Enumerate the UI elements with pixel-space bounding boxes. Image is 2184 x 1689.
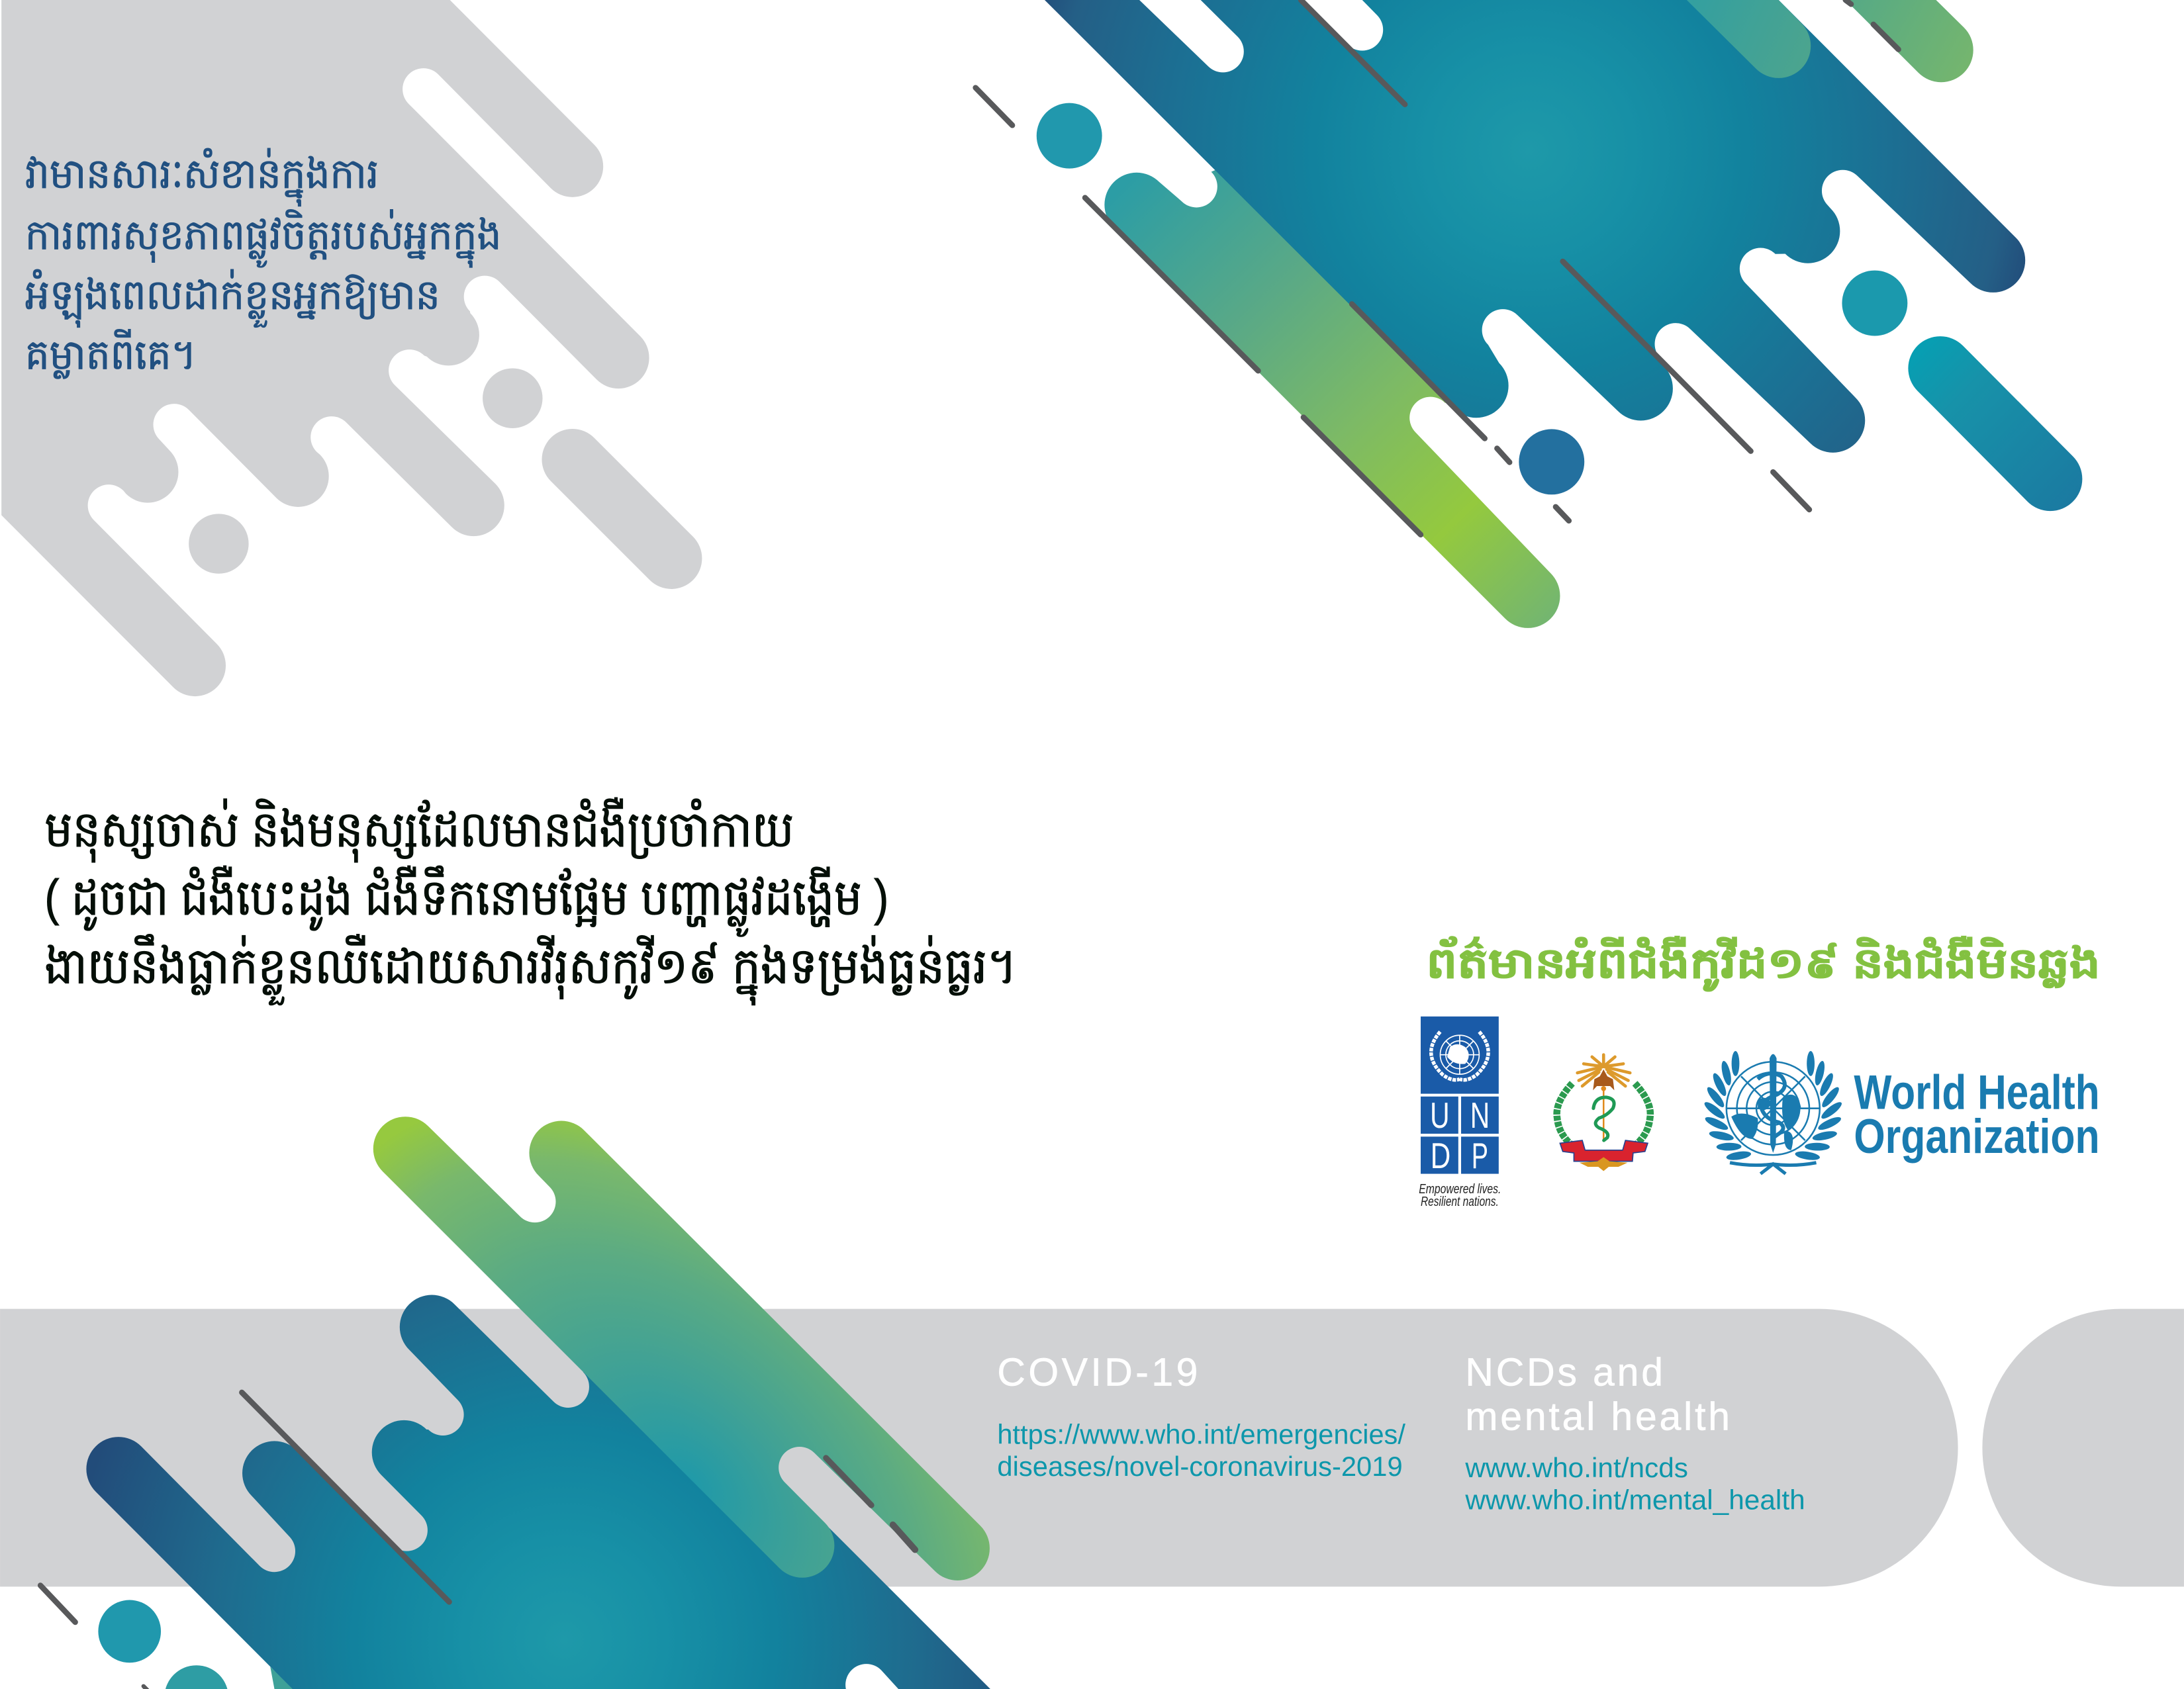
main message text: មនុស្សចាស់ និងមនុស្សដែលមានជំងឺប្រចាំកាយ: [44, 798, 794, 863]
gradient pill: [1940, 368, 2050, 479]
teal lobe: [164, 1665, 228, 1689]
top right graphic: [976, 0, 2050, 628]
green diagonal shape: [373, 1117, 990, 1580]
ribbon: [1730, 1163, 1817, 1174]
footer column: COVID-19: [997, 1351, 1405, 1482]
intro text block: គម្លាតពីគេ។: [25, 329, 197, 379]
footer column: COVID-19: COVID-19: [997, 1351, 1198, 1394]
wreath right: [1795, 1051, 1844, 1162]
wordmark: [1854, 1065, 2100, 1164]
crown: [1593, 1070, 1614, 1090]
blue main shape: [86, 1295, 990, 1689]
main message text: [44, 798, 1017, 1005]
teal circle: [1842, 271, 1907, 336]
teal circle: [1037, 103, 1102, 169]
staff: [1603, 1089, 1604, 1140]
blue main shape: [1045, 0, 2025, 453]
footer column: COVID-19: https://www.who.int/emergencies/: [997, 1419, 1405, 1450]
snake: [1593, 1097, 1614, 1140]
emblem: [1702, 1051, 1844, 1174]
dark accent lines: [976, 0, 1899, 535]
green diagonal shape: [1104, 153, 1560, 628]
intro text block: វាមានសារៈសំខាន់ក្នុងការ: [25, 148, 379, 206]
footer band: [0, 1309, 1958, 1586]
logo: UNDP: D: [1431, 1135, 1450, 1176]
wreath left: [1702, 1051, 1752, 1162]
UN emblem: [1431, 1032, 1488, 1080]
logo: World Health Organization: [1702, 1051, 2100, 1174]
footer column: NCDs and mental health: www.who.int/ncds: [1464, 1452, 1688, 1483]
continents: [1731, 1095, 1801, 1150]
footer column: COVID-19: diseases/novel-coronavirus-2019: [997, 1451, 1403, 1482]
grey decorative shape top left: [1, 0, 671, 696]
staff: [1770, 1054, 1777, 1153]
footer column: NCDs and mental health: NCDs and: [1465, 1351, 1663, 1394]
intro text block: [25, 148, 501, 379]
wordmark: World Health: [1854, 1065, 2100, 1120]
logo: UNDP: [1419, 1017, 1501, 1209]
globe: [1727, 1062, 1820, 1155]
green heading: ព័ត៌មានអំពីជំងឺកូវីដ១៩ និងជំងឺមិនឆ្លង: [1426, 936, 2101, 992]
footer column: NCDs and mental health: [1464, 1351, 1805, 1516]
intro text block: អំឡុងពេលដាក់ខ្លួនអ្នកឱ្យមាន: [25, 269, 440, 328]
logo: UNDP: Resilient nations.: [1421, 1195, 1499, 1209]
logo: Ministry of Health Cambodia: [1557, 1055, 1650, 1171]
footer end blob: [1982, 1309, 2184, 1586]
green pill at top: [1846, 0, 1973, 82]
blue circle: [1519, 429, 1584, 494]
logo: UNDP: U: [1430, 1095, 1450, 1136]
logo: UNDP: P: [1472, 1135, 1488, 1176]
dark accent lines: [40, 1392, 915, 1689]
snake: [1758, 1073, 1785, 1139]
laurel wreath: [1557, 1083, 1650, 1144]
teal circle: [98, 1600, 161, 1663]
main message text: ( ដូចជា ជំងឺបេះដូង ជំងឺទឹកនោមផ្អែម បញ្ហាផ្លូវដង្ហើម ): [44, 866, 888, 937]
bottom left graphic: [40, 1117, 990, 1689]
footer column: NCDs and mental health: mental health: [1465, 1396, 1730, 1439]
teal wedge: [270, 1666, 294, 1689]
wordmark: Organization: [1854, 1109, 2100, 1164]
teal notch shape at top: [1687, 0, 1811, 78]
logo: UNDP: N: [1470, 1095, 1490, 1136]
intro text block: ការពារសុខភាពផ្លូវចិត្តរបស់អ្នកក្នុង: [25, 209, 501, 268]
ornament: [1580, 1157, 1627, 1171]
banner: [1560, 1140, 1648, 1162]
main message text: ងាយនឹងធ្លាក់ខ្លួនឈឺដោយសារវីរុសកូវី១៩ ក្នុងទម្រង់ធ្ងន់ធ្ងរ។: [44, 934, 1017, 1005]
sun rays: [1578, 1055, 1630, 1086]
logo: UNDP: Empowered lives.: [1419, 1182, 1501, 1197]
footer column: NCDs and mental health: www.who.int/mental_health: [1464, 1484, 1805, 1516]
